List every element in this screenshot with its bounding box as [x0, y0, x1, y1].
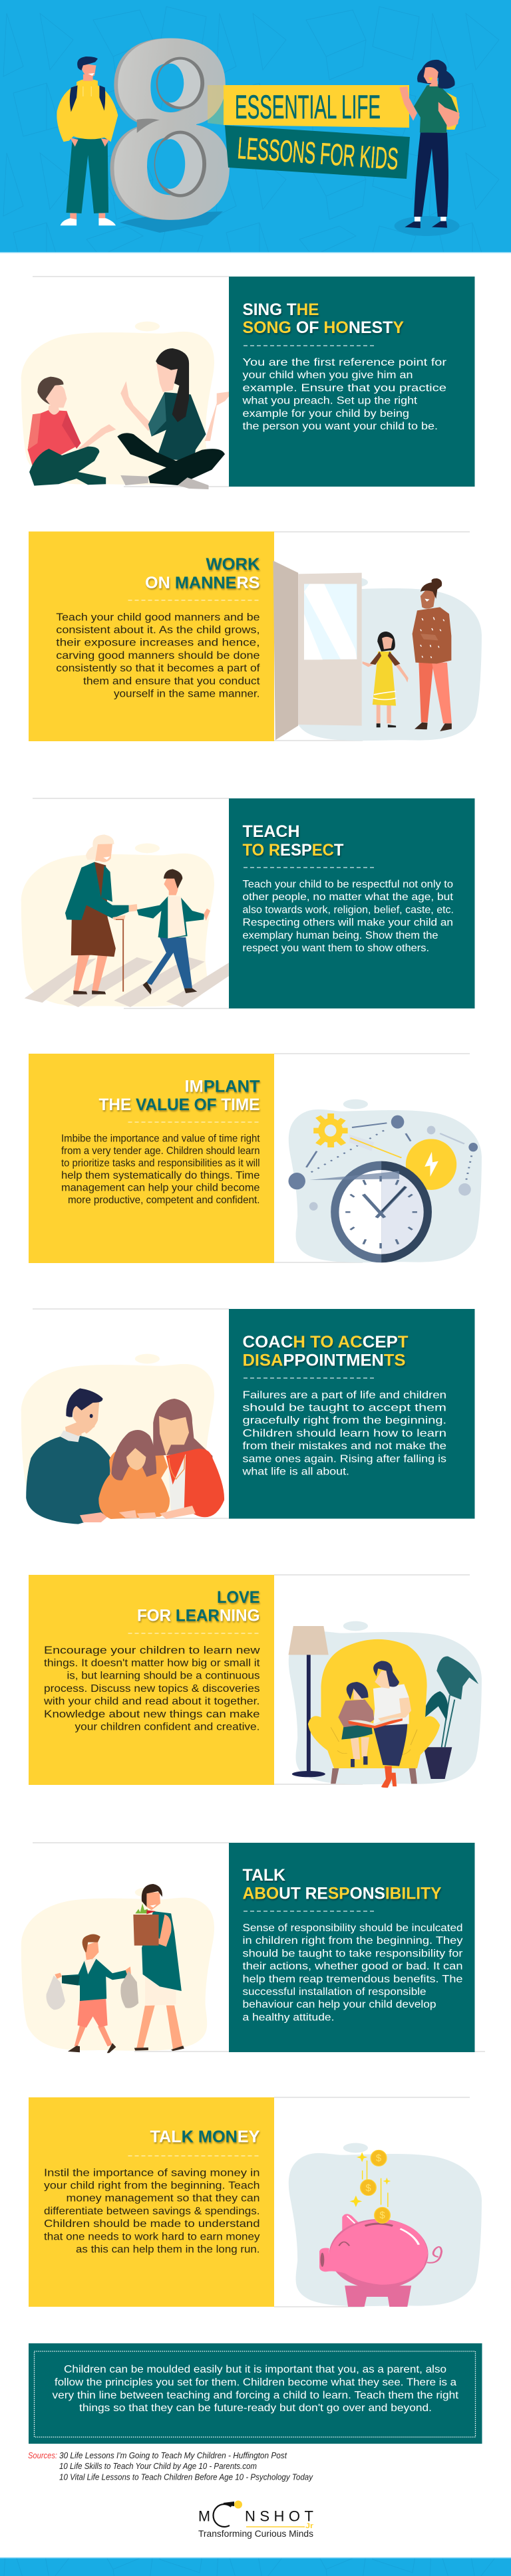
body text: example for your child by being	[242, 408, 409, 419]
teal text card	[229, 277, 475, 487]
body text: process. Discuss new topics & discoveries	[44, 1683, 259, 1695]
body text: Children should be made to understand	[44, 2218, 259, 2230]
body text	[242, 1923, 463, 2023]
body text: also towards work, religion, belief, caste, etc.	[242, 904, 454, 915]
shadow below the numeral 8	[120, 211, 223, 233]
panel 1: sing the song of honesty	[21, 277, 474, 489]
body text: consistently so that it becomes a part of	[56, 663, 260, 674]
rule lines	[274, 2097, 470, 2307]
heading: COACH TO ACCEPT	[242, 1333, 409, 1351]
body text: Failures are a part of life and children	[242, 1389, 446, 1401]
body text: from their mistakes and not make the	[242, 1441, 446, 1452]
body text	[56, 612, 260, 699]
yellow text card	[29, 1575, 274, 1785]
heading: TO RESPECT	[242, 841, 343, 860]
panel 7: talk about responsibility	[21, 1843, 485, 2053]
body text: yourself in the same manner.	[114, 689, 259, 699]
header banner	[0, 0, 511, 273]
yellow text card	[29, 1054, 274, 1263]
body text: that one needs to work hard to earn money	[44, 2231, 259, 2242]
body text: what you preach. Set up the right	[242, 396, 418, 407]
body text: to prioritize tasks and responsibilities as it will	[61, 1158, 259, 1169]
conclusion text: things so that they can be future-ready but don't go over and beyond.	[79, 2402, 432, 2414]
body text: more productive, competent and confident.	[68, 1195, 259, 1206]
heading	[242, 822, 343, 860]
logo: Moonshot Jr: Transforming Curious Minds	[198, 2528, 313, 2539]
illustration: parents comforting daughter	[21, 1354, 224, 1524]
body text: differentiate between savings & spendings.	[44, 2206, 259, 2217]
teal text card	[229, 1309, 475, 1518]
illustration: mother and daughter at a door	[273, 560, 482, 741]
body text: their exposure increases and hence,	[56, 638, 260, 649]
body text	[242, 357, 447, 432]
body text: Teach your child good manners and be	[56, 612, 260, 623]
footer band	[0, 2557, 511, 2576]
body text	[242, 1389, 446, 1477]
illustration: grandmother and boy crossing	[21, 834, 229, 1007]
heading	[137, 1588, 259, 1625]
logo: Moonshot Jr: M	[198, 2508, 210, 2525]
heading: TALK MONEY	[150, 2128, 260, 2147]
illustration: mother and son with shopping	[21, 1884, 214, 2053]
yellow text card	[29, 532, 274, 741]
body text: Respecting others will make your child an	[242, 917, 453, 929]
conclusion text: Children can be moulded easily but it is important that you, as a parent, also	[64, 2364, 446, 2375]
heading: DISAPPOINTMENTS	[242, 1351, 406, 1370]
heading: ON MANNERS	[145, 574, 259, 592]
body text: same ones again. Rising after falling is	[242, 1453, 446, 1464]
body text: Knowledge about new things can make	[44, 1708, 260, 1720]
body text: their actions, whether good or bad. It can	[242, 1961, 463, 1972]
heading: TALK	[242, 1866, 285, 1885]
illustration: piggy bank and coins: $	[365, 2182, 371, 2194]
conclusion text	[52, 2364, 459, 2414]
body text: a healthy attitude.	[242, 2012, 334, 2023]
illustration: clock with gear and lightning	[288, 1100, 482, 1262]
rule lines	[33, 798, 229, 1008]
conclusion text: follow the principles you set for them. Children become what they see. There is a	[55, 2377, 456, 2388]
body text	[43, 1645, 260, 1732]
heading: LOVE	[217, 1588, 259, 1607]
heading: THE VALUE OF TIME	[98, 1096, 259, 1114]
body text: help them systematically do things. Time	[61, 1170, 260, 1181]
body text: what life is all about.	[242, 1466, 349, 1477]
teal text card	[229, 1843, 475, 2052]
body text: behaviour can help your child develop	[242, 1999, 436, 2010]
rule lines	[33, 1309, 229, 1518]
logo: Moonshot Jr: NSHOT	[245, 2508, 313, 2525]
panel 4: implant the value of time	[29, 1054, 482, 1263]
conclusion box	[29, 2343, 482, 2444]
body text: other people, no matter what the age, but	[242, 891, 454, 903]
body text: things. It doesn't matter how big or small it	[44, 1658, 260, 1669]
title banner: yellow ribbon: ESSENTIAL LIFE	[235, 88, 381, 126]
body text: help them reap tremendous benefits. The	[242, 1974, 463, 1985]
panel 2: work on manners	[29, 532, 482, 741]
body text: carving good manners should be done	[56, 650, 260, 661]
body text: should be taught to take responsibility for	[242, 1948, 463, 1959]
heading	[98, 1078, 259, 1114]
body text: is, but learning should be a continuous	[67, 1671, 259, 1682]
heading	[242, 1866, 442, 1903]
logo: Moonshot Jr: Jr	[305, 2522, 314, 2530]
body text: respect you want them to show others.	[242, 943, 429, 954]
body text: your children confident and creative.	[75, 1722, 259, 1732]
body text: Sense of responsibility should be inculcated	[242, 1923, 463, 1934]
rule lines	[274, 532, 470, 741]
body text: gracefully right from the beginning.	[242, 1415, 446, 1427]
body text: Teach your child to be respectful not only to	[242, 879, 453, 890]
illustration: piggy bank and coins: $	[376, 2153, 382, 2164]
heading	[242, 1333, 409, 1370]
body text: the person you want your child to be.	[242, 421, 438, 432]
body text: your child right from the beginning. Teach	[44, 2180, 259, 2191]
title banner: teal ribbon	[225, 125, 410, 179]
body text: Children should learn how to learn	[242, 1428, 446, 1439]
panel 6: love for learning	[29, 1575, 482, 1788]
panel 5: coach to accept disappointments	[21, 1309, 474, 1524]
heading: FOR LEARNING	[137, 1607, 259, 1625]
rule lines	[33, 1843, 485, 2051]
heading: ABOUT RESPONSIBILITY	[242, 1885, 442, 1903]
body text: management can help your child become	[61, 1183, 260, 1194]
sources: 30 Life Lessons I'm Going to Teach My Children - Huffington Post	[59, 2450, 287, 2460]
heading: TEACH	[242, 822, 299, 841]
heading: SONG OF HONESTY	[242, 318, 404, 337]
rule lines	[274, 1054, 470, 1262]
body text: with your child and read about it together.	[43, 1696, 260, 1707]
heading	[145, 555, 259, 592]
sources: Sources:	[28, 2450, 57, 2460]
body text: successful installation of responsible	[242, 1986, 426, 1998]
body text: as this can help them in the long run.	[76, 2244, 259, 2255]
body text: consistent about it. As the child grows,	[56, 625, 260, 636]
rule lines	[274, 1575, 470, 1784]
body text	[242, 879, 454, 954]
conclusion text: very thin line between teaching and forcing a child to learn. Teach them the right	[52, 2390, 459, 2401]
body text: Instil the importance of saving money in	[44, 2167, 259, 2178]
panel 3: teach to respect	[21, 798, 474, 1008]
header background	[0, 0, 511, 252]
sources: 10 Vital Life Lessons to Teach Children Before Age 10 - Psychology Today	[59, 2472, 313, 2482]
body text	[44, 2167, 259, 2255]
sources	[28, 2450, 313, 2482]
body text: You are the first reference point for	[242, 357, 447, 368]
heading	[242, 300, 404, 337]
sources: 10 Life Skills to Teach Your Child by Age 10 - Parents.com	[59, 2461, 257, 2471]
rule lines	[33, 277, 229, 487]
body text: should be taught to accept them	[242, 1403, 446, 1413]
illustration: boy with backpack	[57, 57, 118, 225]
panel 8: talk money	[29, 2097, 482, 2307]
body text: in children right from the beginning. They	[242, 1935, 463, 1946]
logo: Moonshot Jr	[198, 2501, 314, 2539]
body text: exemplary human being. Show them the	[242, 930, 438, 941]
body text: money management so that they can	[67, 2193, 259, 2204]
illustration: woman with backpack	[395, 60, 460, 236]
body text: your child when you give him an	[242, 370, 413, 381]
body text: from a very tender age. Children should learn	[61, 1145, 259, 1157]
body text: Imbibe the importance and value of time right	[61, 1133, 260, 1145]
illustration: piggy bank and coins	[289, 2143, 482, 2307]
heading: IMPLANT	[185, 1078, 259, 1096]
teal text card	[229, 798, 475, 1008]
heading: SING THE	[242, 300, 319, 319]
body text: example. Ensure that you practice	[242, 382, 446, 394]
heading: WORK	[206, 555, 259, 574]
illustration: piggy bank and coins: $	[379, 2210, 385, 2221]
illustration: mother reading with daughter in armchair	[288, 1621, 482, 1788]
title banner: yellow ribbon	[208, 85, 409, 128]
illustration: mother and son talking	[21, 322, 234, 489]
yellow text card	[29, 2097, 274, 2307]
body text	[61, 1133, 260, 1206]
body text: Encourage your children to learn new	[44, 1645, 260, 1656]
body text: them and ensure that you conduct	[83, 675, 260, 687]
